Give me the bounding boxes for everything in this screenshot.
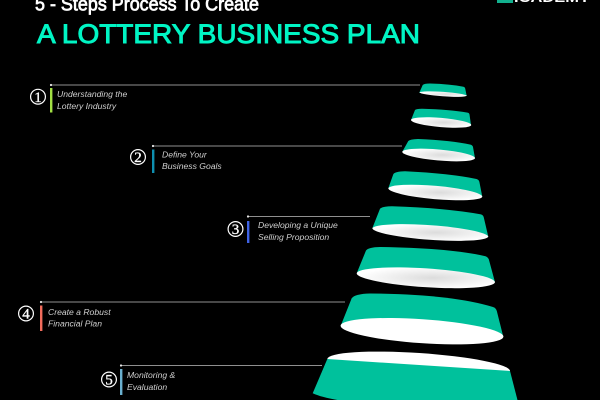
title: main heading: A LOTTERY BUSINESS PLAN <box>37 19 420 49</box>
step 5: Monitoring & Evaluation <box>102 364 322 395</box>
tier 2 <box>411 109 471 128</box>
step 2: Define Your Business Goals: Business Goals <box>162 161 222 171</box>
step 3: Developing a Unique Selling Proposition: Developing a Unique <box>258 220 338 230</box>
step 2: Define Your Business Goals: Define Your <box>162 150 208 160</box>
step 5: Monitoring & Evaluation: Evaluation <box>127 382 167 392</box>
step 2: Define Your Business Goals <box>131 145 402 173</box>
tier 6 <box>357 247 495 288</box>
step 1: Understanding the Lottery Industry <box>31 84 420 112</box>
tier 7 <box>340 294 504 349</box>
funnel: stacked tiers <box>313 84 518 400</box>
tier 8 <box>313 347 518 400</box>
logo: cropped brand mark <box>497 0 591 5</box>
step 4: Create a Robust Financial Plan: Financial Plan <box>48 318 102 328</box>
tier 1 <box>419 84 467 97</box>
tier 4 <box>388 171 482 200</box>
step 5: Monitoring & Evaluation: 5 <box>105 373 113 389</box>
step 4: Create a Robust Financial Plan: 4 <box>22 307 30 323</box>
step 1: Understanding the Lottery Industry: 1 <box>34 90 42 106</box>
tier 5 <box>372 206 488 241</box>
step 3: Developing a Unique Selling Proposition: 3 <box>232 222 239 238</box>
tier 3 <box>402 139 475 161</box>
step 5: Monitoring & Evaluation: Monitoring & <box>127 370 176 380</box>
step 3: Developing a Unique Selling Proposition: Selling Proposition <box>258 232 329 242</box>
step 1: Understanding the Lottery Industry: Lottery Industry <box>57 101 117 111</box>
step 3: Developing a Unique Selling Proposition <box>228 215 370 243</box>
step 4: Create a Robust Financial Plan <box>19 301 345 331</box>
step 1: Understanding the Lottery Industry: Understanding the <box>57 89 127 99</box>
step 4: Create a Robust Financial Plan: Create a Robust <box>48 307 111 317</box>
step 2: Define Your Business Goals: 2 <box>134 150 142 166</box>
